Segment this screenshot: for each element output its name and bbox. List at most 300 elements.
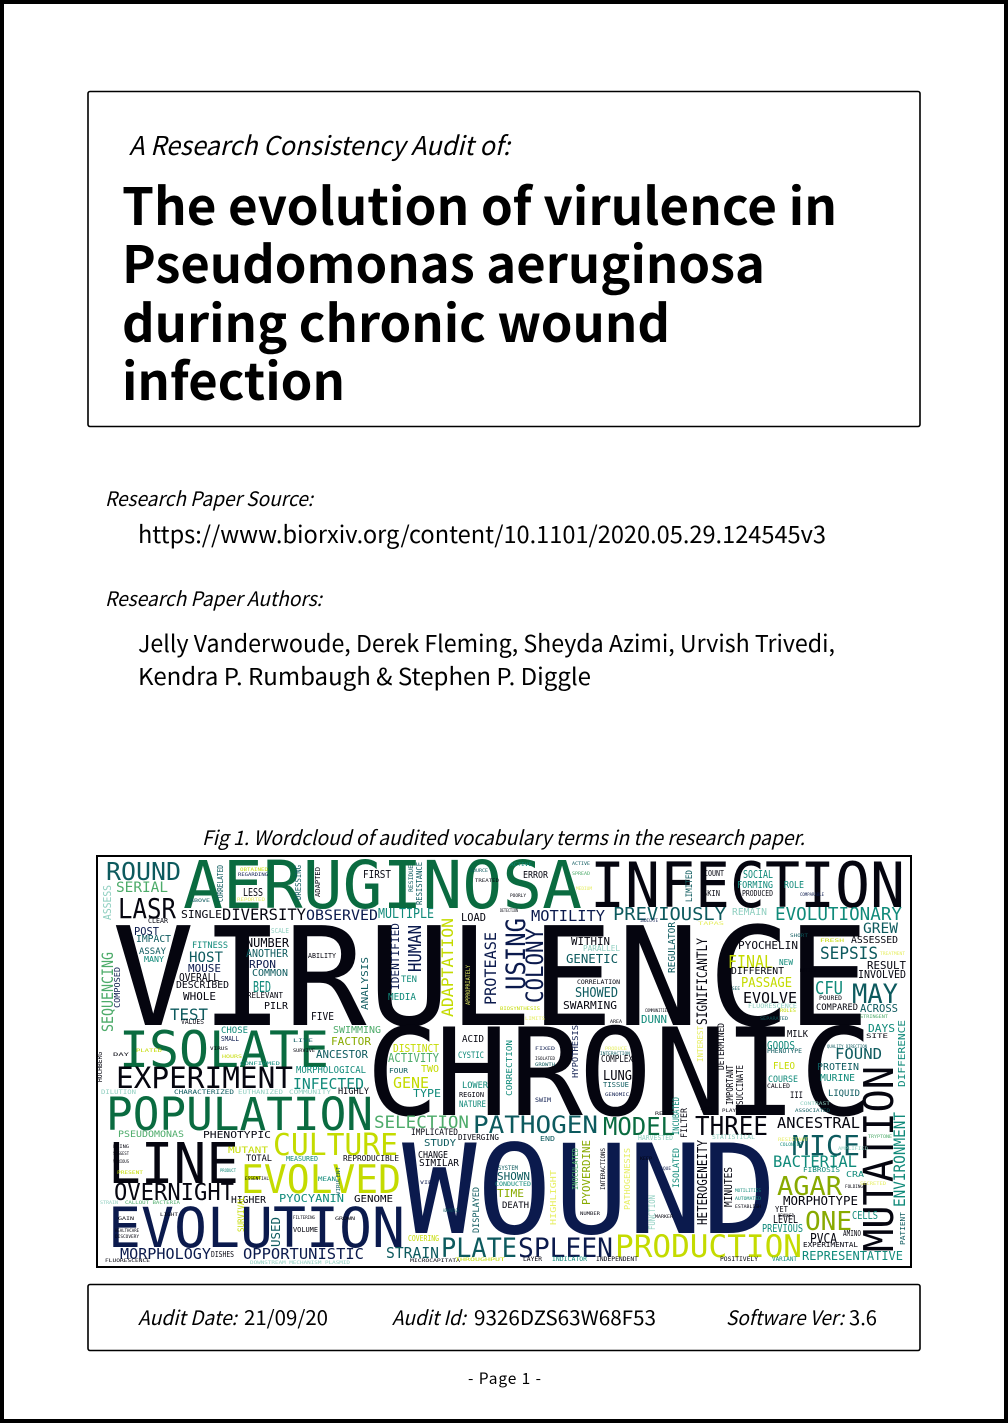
other words: REPRESENTATIVE [802, 1249, 903, 1263]
other words: FIBROSIS [803, 1166, 840, 1174]
other words: CELLS [852, 1209, 878, 1222]
other words: SOCIAL [743, 868, 773, 881]
other words: OBSERVED [306, 908, 378, 924]
software version: Software Ver: [726, 1302, 845, 1331]
small filler words: SHOWING [704, 880, 724, 886]
other words: WHOLE [183, 990, 216, 1003]
other words: DAYS [868, 1022, 895, 1035]
audit id: Audit Id: [392, 1302, 467, 1331]
small filler words: COMPARABLE [800, 892, 824, 898]
small filler words: FLUORESCENCE [105, 1258, 150, 1264]
other words: INVOLVED [858, 968, 906, 981]
other words: IMPACT [136, 934, 171, 945]
small filler words: MOTILE [800, 968, 816, 974]
other words: CLEAR [148, 917, 169, 925]
small filler words: PLAQUE [655, 1166, 671, 1172]
other words: PILR [264, 1001, 289, 1012]
other words: RESULT [867, 959, 906, 972]
title heading: infection [122, 341, 345, 415]
authors list [138, 625, 835, 692]
other words: SHOWED [575, 986, 618, 1001]
small filler words: DISCOVERY [115, 1234, 139, 1240]
other words: MICE [792, 1129, 860, 1162]
other words: BACTERIAL [773, 1152, 857, 1171]
other words: INCUBATED [672, 1097, 682, 1135]
other words: SPLEEN [518, 1233, 613, 1264]
panel: audit info footer [88, 1284, 920, 1350]
other words: FOUR [389, 1067, 409, 1075]
other words: MURINE [820, 1073, 855, 1084]
other words: COMPARED [816, 1003, 858, 1013]
small filler words: PLAY [722, 1108, 736, 1114]
page number: - Page 1 - [468, 1367, 541, 1389]
other words: GOODS [767, 1039, 795, 1052]
other words: NUMBER [246, 936, 290, 950]
other words: SWARMING [563, 999, 617, 1012]
other words: REGION [459, 1091, 484, 1099]
small filler words: SUGGEST [113, 1151, 129, 1157]
small filler words: MICROCAPITATA [410, 1258, 460, 1264]
small filler words: READ [655, 1111, 671, 1117]
small filler words: HEALTHCARE [115, 1228, 139, 1234]
other words: PRODUCED [742, 889, 773, 898]
small filler words: SHORT [790, 933, 808, 939]
other words: TYPE [413, 1087, 441, 1100]
small filler words: VIRUS [210, 1046, 228, 1052]
other words: MORPHOTYPE [783, 1194, 858, 1208]
small filler words: AREA [610, 1019, 622, 1025]
small filler words: LIMITS [525, 1016, 545, 1022]
other words: STRAIN [386, 1244, 439, 1262]
small filler words: SECRETED [860, 1181, 886, 1187]
other words: MEAN [318, 1176, 336, 1183]
other words: SIMILAR [419, 1158, 460, 1169]
small filler words: LIGHT [160, 1212, 178, 1218]
other words: MINUTES [722, 1167, 735, 1207]
other words: CHANGE [418, 1150, 448, 1161]
other words: CALLED [767, 1083, 790, 1090]
other words: SHOWN [497, 1170, 530, 1183]
other words: OVERNIGHT [114, 1180, 234, 1206]
small filler words: KEEP [640, 1156, 652, 1162]
other words: DILUTION [101, 1088, 136, 1096]
other words: ASSESSED [851, 935, 898, 946]
other words: EUTHANIZED [238, 1088, 283, 1096]
other words: MILK [787, 1029, 808, 1040]
other words: TOTAL [246, 1154, 272, 1164]
other words: FILTER [680, 1107, 690, 1138]
other words: HIGHLIGHT [549, 1170, 558, 1225]
other words: ABILITY [308, 952, 337, 960]
small filler words: COMMUNITIES [645, 1008, 669, 1014]
other words: PRODUCTION [615, 1229, 802, 1265]
other words: BED [253, 978, 271, 996]
other words: TISSUE [603, 1081, 629, 1089]
other words: ASSAY [139, 947, 167, 957]
other words: ANCESTOR [316, 1048, 368, 1061]
other words: SIGNIFICANTLY [695, 938, 711, 1025]
other words: INTERACTIONS [600, 1148, 607, 1190]
other words: CYSTIC [458, 1051, 484, 1061]
other words: LIMITED [685, 870, 695, 902]
other words: ASSESS [101, 885, 114, 920]
other words: PHENOTYPIC [203, 1130, 271, 1141]
other words: PSEUDOMONAS [118, 1130, 184, 1140]
audit date: 21/09/20 [244, 1302, 328, 1331]
other words: IMPLICATED [411, 1128, 458, 1138]
other words: REPRODUCIBLE [343, 1154, 399, 1163]
other words: PYOVERDINE [580, 1140, 593, 1205]
other words: EXPERIMENTAL [803, 1241, 858, 1249]
other words: TEN [401, 975, 417, 985]
authors label: Research Paper Authors: [105, 583, 323, 612]
other words: PROTEASE [481, 932, 500, 1005]
other words: ISOLATED [672, 1148, 682, 1188]
other words: HOCHBERG [96, 1052, 104, 1082]
small filler words: QUALITY DIRECTION [827, 1044, 867, 1050]
small filler words: INTERACTION [600, 1051, 630, 1057]
small filler words: TAPAS [698, 921, 725, 927]
other words: GENETIC [566, 952, 618, 966]
other words: PREVIOUSLY [613, 904, 726, 925]
other words: PREVIOUS [762, 1222, 803, 1235]
small filler words: REGARDING [238, 872, 268, 878]
small filler words: STRAIN [100, 1200, 118, 1206]
small filler words: ISOLATED [535, 1056, 555, 1062]
other words: MORPHOLOGY [120, 1245, 211, 1263]
audit subtitle: A Research Consistency Audit of: [129, 126, 512, 163]
other words: SELECTION [374, 1113, 469, 1133]
other words: RESISTANCE [415, 862, 424, 905]
title heading [122, 166, 837, 415]
small filler words: SURVIVE [293, 1048, 315, 1054]
other words: PHENOTYPE [767, 1048, 802, 1055]
other words: ACTIVITY [388, 1051, 440, 1065]
small filler words: NUMBER [580, 1211, 600, 1217]
other words: CORRELATED [216, 865, 225, 902]
small filler words: THROUGHPUT [455, 1257, 506, 1263]
other words: EVOLUTIONARY [775, 904, 902, 925]
other words: VALUES [181, 1018, 204, 1026]
small filler words: CONTRAST [800, 1101, 830, 1107]
small filler words: DOWNSTREAM MECHANISM PLASMID [250, 1260, 350, 1266]
title heading: The evolution of virulence in [122, 166, 837, 240]
big word: virulence: VIRULENCE [112, 899, 869, 1058]
other words: INOCULATED [571, 1148, 580, 1190]
other words: USED [269, 1217, 283, 1247]
other words: GENOME [354, 1194, 393, 1205]
other words: OPPORTUNISTIC [243, 1245, 364, 1263]
other words: FACTOR [331, 1035, 371, 1048]
other words: PVCA [810, 1232, 837, 1247]
other words: IMPORTANT [725, 1065, 736, 1105]
big word: aeruginosa: AERUGINOSA [183, 847, 582, 924]
other words: COMMON [252, 968, 288, 979]
other words: HYPOTHESIS [571, 1025, 580, 1078]
other words: COMPLEX [601, 1054, 633, 1065]
title heading: Pseudomonas aeruginosa [122, 224, 765, 298]
other words: MOTILITY [531, 907, 605, 925]
other words: HETEROGENEITY [696, 1140, 711, 1225]
other words: TWO [421, 1064, 439, 1075]
other words: TIME [497, 1187, 524, 1200]
other words: APPROPRIATELY [465, 965, 472, 1005]
other words: WITHIN [571, 935, 610, 948]
other words: SUCCINATE [735, 1065, 746, 1105]
small filler words: GAIN [118, 1216, 134, 1222]
other words: ACROSS [860, 1002, 898, 1015]
small filler words: ESTABLISH [735, 1204, 761, 1210]
other words: DISPLAYED [472, 1187, 482, 1233]
other words: DEATH [502, 1201, 529, 1211]
word: evolution: EVOLUTION [108, 1196, 405, 1260]
small filler words: REMOVED [778, 1213, 794, 1219]
other words: USING [501, 918, 532, 990]
other words: ADAPTATION [438, 918, 457, 1017]
other words: INTEREST [696, 1026, 705, 1062]
other words: PATIENT [899, 1211, 907, 1245]
other words: SMALL [221, 1035, 239, 1043]
source label: Research Paper Source: [105, 483, 314, 512]
other words: SEQUENCING [98, 952, 117, 1032]
other words: CRA [846, 1170, 864, 1179]
other words: COMMUNITY [289, 1088, 331, 1096]
other words: DUNN [641, 1013, 667, 1026]
other words: VOLUME [293, 1226, 318, 1234]
other words: SURVIVAL [237, 1196, 247, 1232]
small filler words: ROLES [780, 1008, 796, 1014]
other words: INDEPENDENT [596, 1256, 638, 1263]
other words: INFECTED [293, 1075, 364, 1093]
other words: PATHOGEN [473, 1111, 598, 1139]
small filler words: GROWN [335, 1216, 355, 1222]
other words: NATURE [459, 1100, 486, 1110]
other words: RELEVANT [247, 991, 283, 1000]
other words: FIVE [311, 1010, 334, 1023]
small filler words: TREATED [475, 878, 499, 884]
small filler words: CALLOUT BACTERIA [125, 1200, 180, 1206]
small filler words: REPORTED [237, 897, 265, 903]
other words: PYOCHELIN [738, 939, 798, 952]
small filler words: INDICATE [640, 918, 658, 924]
other words: RPON [249, 958, 276, 971]
small filler words: ABOVE [190, 898, 210, 904]
other words: AMINO [843, 1229, 861, 1238]
other words: HARVESTED [638, 1134, 673, 1142]
title heading: during chronic wound [122, 283, 670, 357]
other words: PATHOGENESIS [623, 1148, 632, 1210]
big word: infection: INFECTION [590, 849, 905, 922]
other words: HIGHER [231, 1195, 267, 1206]
other words: MULTIPLE [378, 907, 434, 922]
small filler words: SEE [732, 986, 740, 992]
small filler words: PRESENT [117, 1170, 143, 1176]
other words: ERROR [523, 870, 549, 881]
other words: REMAIN [732, 907, 767, 918]
small filler words: COLONIES [780, 1142, 802, 1148]
other words: ROUND [106, 857, 181, 886]
small filler words: GENOMIC [605, 1092, 629, 1098]
other words: MANY [144, 955, 164, 964]
other words: ROLE [784, 880, 804, 891]
other words: VARIANT [772, 1256, 797, 1263]
small filler words: VARIOUS [113, 1159, 129, 1165]
other words: MEASURED [286, 1155, 318, 1163]
other words: PARALLEL [583, 944, 620, 953]
other words: COLONY [521, 928, 549, 1003]
big word: wound: WOUND [402, 1119, 777, 1263]
small filler words: ACTIVE [572, 861, 590, 867]
small filler words: FRESH [820, 938, 845, 944]
audit date [138, 1302, 328, 1331]
other words: COMPOSED [113, 967, 122, 1008]
other words: LOWER [462, 1081, 489, 1091]
other words: ACID [462, 1034, 484, 1045]
small filler words: PRODUCE [605, 1046, 627, 1052]
small filler words: FOLDING [845, 1184, 863, 1190]
other words: ANALYSIS [360, 957, 371, 1010]
other words: III [790, 1091, 803, 1101]
word: line: LINE [108, 1132, 239, 1197]
other words: DISHES [211, 1250, 234, 1259]
other words: PYOCYANIN [279, 1192, 344, 1205]
other words: EVOLVE [743, 989, 797, 1007]
other words: THREE [695, 1112, 768, 1142]
small filler words: ADVANTAGE [443, 1208, 459, 1214]
small filler words: FILTERING [293, 1215, 315, 1221]
authors list: Kendra P. Rumbaugh & Stephen P. Diggle [138, 658, 591, 692]
other words: PASSAGE [741, 976, 792, 991]
other words: VIRULENT [336, 1167, 342, 1195]
other words: IDENTIFIED [389, 923, 402, 990]
small filler words: PRODUCT [220, 1168, 236, 1174]
other words: SYSTEM [498, 1165, 518, 1172]
small filler words: GROWTH [535, 1062, 555, 1068]
small filler words: SOM [700, 1106, 712, 1112]
other words: GREW [863, 921, 899, 937]
word: isolate: ISOLATE [119, 1021, 329, 1079]
other words: CORRECTION [505, 1040, 514, 1096]
small filler words: ACTIVE [510, 862, 532, 868]
figure caption: Fig 1. Wordcloud of audited vocabulary terms in the research paper. [202, 822, 805, 851]
small filler words: AUTOMATED [735, 1196, 761, 1202]
other words: LIQUID [828, 1089, 860, 1099]
small filler words: ESSENTIAL [245, 1176, 269, 1182]
other words: CFU [815, 978, 843, 999]
other words: SWIMMING [333, 1025, 381, 1036]
other words: DISTINCT [393, 1042, 439, 1055]
small filler words: HOURS [222, 1054, 242, 1060]
other words: SKIN [703, 889, 720, 898]
other words: DETERMINED [717, 1023, 727, 1070]
other words: COVERING [408, 1234, 439, 1243]
small filler words: SPREAD [572, 871, 590, 877]
other words: INDICATOR [552, 1256, 587, 1263]
other words: MODEL [603, 1112, 675, 1141]
other words: HIGHLY [338, 1087, 370, 1097]
other words: DESCRIBED [176, 980, 229, 991]
other words: EXPERIMENT [116, 1061, 293, 1095]
other words: STUDY [424, 1138, 456, 1149]
other words: ONE [805, 1207, 852, 1237]
other words: ANOTHER [246, 947, 288, 960]
other words: SEPSIS [820, 944, 878, 964]
other words: FORMING [737, 880, 773, 891]
small filler words: TRYPTONE [868, 1134, 892, 1140]
word: culture: CULTURE [273, 1128, 398, 1163]
other words: NEW [779, 958, 793, 967]
other words: PROTEIN [817, 1062, 859, 1073]
other words: MEDIA [388, 992, 416, 1003]
small filler words: MARKER [655, 1214, 673, 1220]
other words: ADAPTED [314, 867, 322, 897]
other words: LEVEL [773, 1213, 798, 1226]
other words: DRESSING [294, 865, 303, 900]
other words: ANCESTRAL [777, 1114, 860, 1132]
other words: CORRELATION [577, 979, 620, 986]
small filler words: OBTAINED [240, 867, 268, 873]
source url: https://www.biorxiv.org/content/10.1101/2020.05.29.124545v3 [138, 516, 826, 550]
audit id [392, 1302, 656, 1331]
other words: GENE [393, 1074, 429, 1092]
small filler words: FIXED [535, 1046, 555, 1052]
small filler words: POORLY [510, 893, 526, 899]
small filler words: BIOSYNTHESIS [500, 1006, 540, 1012]
other words: POSITIVELY [720, 1256, 758, 1263]
other words: FUNCTION [648, 1195, 658, 1230]
big word: chronic: CHRONIC [366, 1003, 873, 1144]
other words: SCALE [271, 927, 289, 935]
small filler words: SEPARATED [760, 1016, 788, 1022]
chart: word cloud [96, 847, 911, 1267]
small filler words: SOURCE [470, 868, 488, 874]
other words: DIFFERENT [731, 966, 784, 977]
rotated words: ENVIRONMENT [890, 1112, 909, 1207]
other words: HOST [189, 950, 224, 966]
other words: SINGLE [181, 908, 222, 921]
small filler words: VIEW [420, 1180, 436, 1186]
other words: SERIAL [116, 880, 168, 896]
other words: FIRST [363, 868, 391, 881]
small filler words: STRINGENT [860, 1014, 888, 1020]
small filler words: LIVE [293, 1038, 314, 1044]
other words: COURSE [768, 1075, 798, 1085]
small filler words: TREATMENT [880, 951, 905, 957]
other words: LUNG [603, 1069, 632, 1084]
small filler words: PLATED [136, 1048, 162, 1054]
other words: FITNESS [192, 941, 228, 951]
other words: SITE [866, 1033, 889, 1040]
other words: MORPHOLOGICAL [296, 1065, 366, 1076]
small filler words: ASSOCIATED [795, 1108, 830, 1114]
small filler words: DAY [113, 1052, 130, 1058]
panel: title box [88, 92, 920, 426]
small filler words: RESISTANT [778, 1137, 808, 1143]
other words: MOUSE [188, 962, 221, 975]
other words: LOAD [461, 911, 486, 924]
other words: END [540, 1135, 555, 1143]
other words: COUNT [704, 869, 724, 878]
small filler words: CONFIRMED [240, 1061, 280, 1067]
word: mutation: MUTATION [855, 1066, 903, 1252]
other words: POURED [819, 995, 842, 1002]
other words: LESS [243, 886, 263, 899]
small filler words: MOTILITIES [735, 1188, 761, 1194]
small filler words: BEING [113, 1144, 129, 1150]
other words: SWIM [535, 1097, 551, 1104]
other words: STATISTICAL [712, 1134, 755, 1141]
other words: TEST [170, 1005, 208, 1024]
